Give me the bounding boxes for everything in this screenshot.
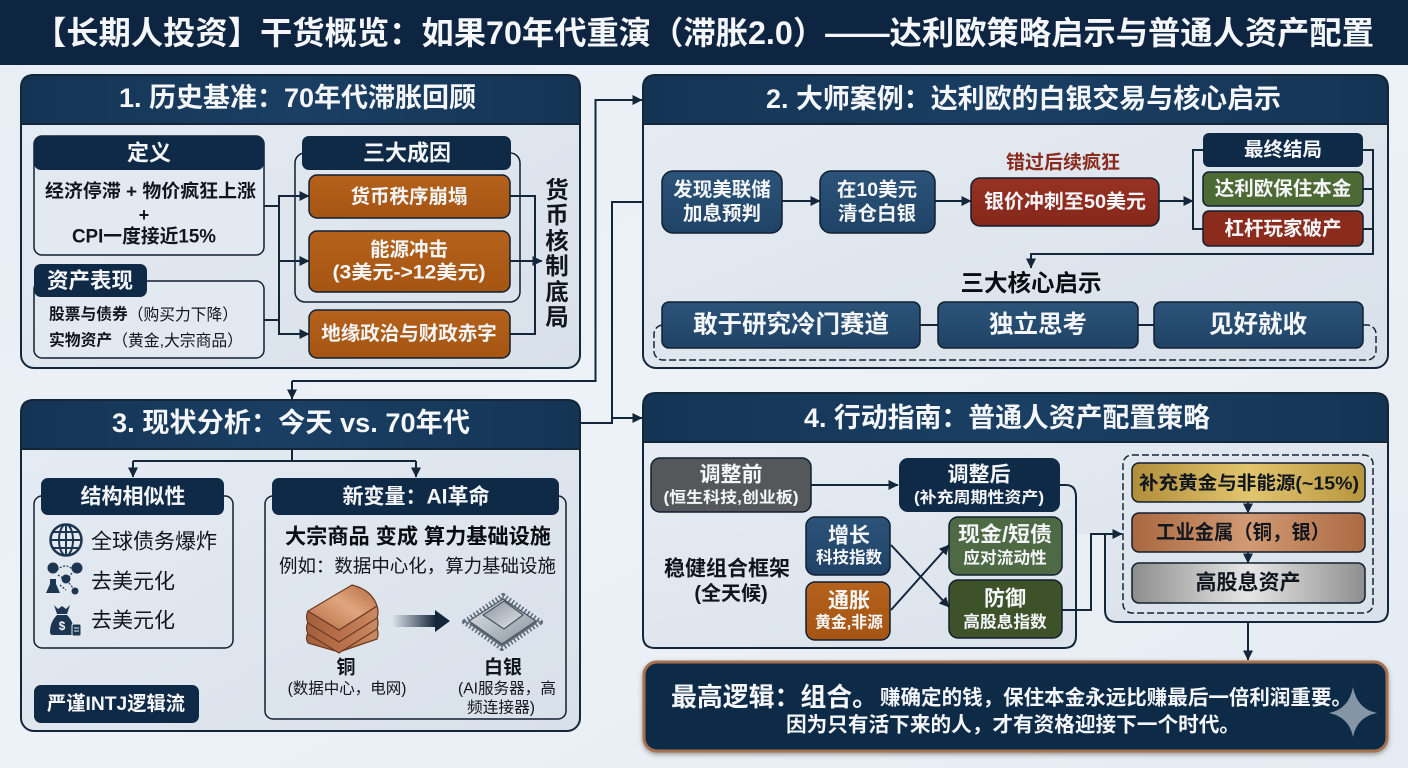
cause: currency order: 货币秩序崩塌 <box>350 185 468 208</box>
lesson: research niches <box>662 302 920 348</box>
heading: three causes <box>302 136 511 170</box>
lesson: take profit: 见好就收 <box>1209 310 1307 338</box>
arrows: into causes <box>264 196 309 334</box>
callout: highest logic: 因为只有活下来的人，才有资格迎接下一个时代。 <box>786 714 1240 736</box>
card: structural similarity: 结构相似性 <box>80 486 186 508</box>
allocation: gold: 补充黄金与非能源(~15%) <box>1139 472 1359 494</box>
panel 4: action guide <box>643 393 1388 648</box>
panel 2 heading <box>643 75 1388 124</box>
step: fed hike call: 加息预判 <box>683 202 761 225</box>
allocation: gold <box>1132 463 1365 502</box>
vertical text: monetary nuclear base: 币 <box>545 202 569 228</box>
card: definition: CPI一度接近15% <box>72 224 216 248</box>
card: structural similarity: 去美元化 <box>91 570 175 594</box>
card: asset performance <box>34 264 264 358</box>
panel 1: historical baseline <box>21 75 580 368</box>
arrow: copper to chip <box>392 610 450 632</box>
callout: highest logic: 赚确定的钱，保住本金永远比赚最后一倍利润重要。 <box>880 686 1352 710</box>
icon: globe <box>50 524 82 556</box>
allocation: industrial metals: 工业金属（铜，银） <box>1156 520 1330 544</box>
step: sold at 10: 清仓白银 <box>838 203 916 225</box>
cause: currency order <box>309 175 510 218</box>
box: defense <box>949 580 1062 638</box>
label: all-weather framework: (全天候) <box>694 581 768 605</box>
box: after adjustment: 调整后 <box>948 464 1010 486</box>
arrow: panel 3 to panel 2 and panel 4 <box>580 202 661 423</box>
box: after adjustment <box>899 458 1060 512</box>
outcome: leveraged bankrupt: 杠杆玩家破产 <box>1224 217 1342 240</box>
label: copper <box>288 656 406 698</box>
arrow: panel 1 to panel 2 and panel 3 <box>292 100 642 399</box>
card: asset performance: 实物资产（黄金,大宗商品） <box>49 330 243 350</box>
step: sold at 10 <box>820 171 935 233</box>
vertical text: monetary nuclear base <box>545 177 569 330</box>
step: fed hike call: 发现美联储 <box>673 178 771 201</box>
label: silver: (AI服务器，高 <box>458 680 556 698</box>
title bar <box>0 0 1408 65</box>
outcome: capital preserved <box>1203 172 1363 206</box>
card: definition: 经济停滞 + 物价疯狂上涨 <box>45 180 257 202</box>
box: defense: 防御 <box>984 588 1026 610</box>
box: growth: 科技指数 <box>816 548 882 567</box>
icon: chip <box>465 596 540 648</box>
icon: copper bars <box>306 585 378 653</box>
outline and flow lines <box>643 442 1388 648</box>
vertical text: monetary nuclear base: 局 <box>545 304 569 330</box>
outcome: capital preserved: 达利欧保住本金 <box>1215 177 1352 200</box>
step: silver to 50 <box>971 178 1159 226</box>
panel 3 heading: 3. 现状分析：今天 vs. 70年代 <box>112 408 470 438</box>
step: fed hike call <box>662 171 782 233</box>
card: structural similarity <box>34 478 233 648</box>
cause: geopolitics: 地缘政治与财政赤字 <box>321 322 497 345</box>
card: new variable AI revolution <box>265 478 566 719</box>
icon: money bag: $ <box>59 619 66 633</box>
box: cash and short bonds: 现金/短债 <box>958 522 1052 546</box>
heading: three causes: 三大成因 <box>363 140 451 166</box>
card: asset performance: 股票与债券（购买力下降） <box>49 304 238 324</box>
callout: highest logic <box>644 662 1387 751</box>
panel 3: current analysis <box>21 400 580 731</box>
card: definition <box>34 136 264 255</box>
vertical text: monetary nuclear base: 底 <box>545 279 569 305</box>
panel 3 heading <box>21 400 580 449</box>
panel 1 heading: 1. 历史基准：70年代滞胀回顾 <box>119 83 476 113</box>
allocation: high dividend: 高股息资产 <box>1196 570 1300 594</box>
step: silver to 50: 银价冲刺至50美元 <box>984 191 1146 213</box>
cause: energy shock <box>309 231 510 292</box>
card: definition: 定义 <box>127 140 171 166</box>
badge: INTJ logic flow: 严谨INTJ逻辑流 <box>47 693 185 715</box>
card: new variable AI revolution: 例如：数据中心化，算力基础设施 <box>279 556 556 576</box>
lesson: take profit <box>1154 302 1363 348</box>
cause: geopolitics <box>309 310 510 358</box>
card: structural similarity: 去美元化 <box>91 610 175 632</box>
arrows: branch to two cards <box>133 449 416 477</box>
box: after adjustment: (补充周期性资产) <box>914 488 1044 506</box>
box: growth <box>806 517 890 575</box>
panel 1 heading <box>21 75 580 124</box>
panel 4 heading: 4. 行动指南：普通人资产配置策略 <box>804 403 1210 433</box>
panel 2: master case <box>643 75 1388 368</box>
label: silver: 频连接器) <box>467 698 535 716</box>
vertical text: monetary nuclear base: 货 <box>545 177 569 203</box>
box: cash and short bonds <box>949 517 1062 575</box>
dashed allocation group <box>1123 455 1373 613</box>
dashed frame and lessons row <box>654 302 1376 360</box>
label: all-weather framework <box>664 558 790 605</box>
label: missed frenzy: 错过后续疯狂 <box>1006 152 1120 174</box>
card: definition: + <box>139 205 149 225</box>
box: growth: 增长 <box>828 524 870 548</box>
label: silver: 白银 <box>484 656 522 678</box>
outcome: header <box>1203 133 1363 167</box>
box: before adjustment <box>651 458 811 512</box>
lesson: think independently <box>938 302 1138 348</box>
cause: energy shock: (3美元->12美元) <box>332 262 486 284</box>
arrows: flow steps <box>782 150 1373 268</box>
card: asset performance: 资产表现 <box>47 269 133 293</box>
panel 2 heading: 2. 大师案例：达利欧的白银交易与核心启示 <box>766 84 1281 114</box>
panel 4 heading <box>643 393 1388 442</box>
allocation: industrial metals <box>1132 513 1365 552</box>
arrow: panel 4 to conclusion <box>1247 622 1249 660</box>
card: new variable AI revolution: 新变量：AI革命 <box>342 484 490 508</box>
box: inflation: 通胀 <box>828 590 870 612</box>
vertical text: monetary nuclear base: 核 <box>545 228 569 254</box>
arrows: out of causes <box>510 196 542 334</box>
icon: network <box>46 562 82 594</box>
outcome: header: 最终结局 <box>1244 139 1322 161</box>
icon: sparkle star <box>1329 687 1377 737</box>
box: inflation <box>806 582 890 640</box>
box: before adjustment: 调整前 <box>700 464 762 486</box>
cause: energy shock: 能源冲击 <box>370 239 448 261</box>
card: new variable AI revolution: 大宗商品 变成 算力基础设施 <box>285 524 551 548</box>
icon: money bag <box>50 605 81 636</box>
title bar: 【长期人投资】干货概览：如果70年代重演（滞胀2.0）——达利欧策略启示与普通人资产配置 <box>34 15 1374 51</box>
outline: three causes group <box>295 153 520 302</box>
box: cash and short bonds: 应对流动性 <box>963 548 1047 568</box>
box: inflation: 黄金,非源 <box>815 612 883 632</box>
arrows: between allocations <box>1247 502 1249 563</box>
badge: INTJ logic flow <box>34 685 199 723</box>
lesson: think independently: 独立思考 <box>989 310 1087 338</box>
label: copper: 铜 <box>336 656 356 678</box>
lesson: research niches: 敢于研究冷门赛道 <box>693 310 889 338</box>
box: defense: 高股息指数 <box>963 612 1047 632</box>
box: before adjustment: (恒生科技,创业板) <box>664 488 798 506</box>
vertical text: monetary nuclear base: 制 <box>545 253 569 279</box>
label: copper: (数据中心，电网) <box>288 680 406 698</box>
allocation: high dividend <box>1132 563 1365 603</box>
label: silver <box>458 656 556 716</box>
heading: three core lessons: 三大核心启示 <box>960 270 1102 296</box>
callout: highest logic: 最高逻辑：组合。 <box>671 682 878 712</box>
outcome: leveraged bankrupt <box>1203 211 1363 246</box>
step: sold at 10: 在10美元 <box>837 179 917 201</box>
card: structural similarity: 全球债务爆炸 <box>91 530 217 554</box>
label: all-weather framework: 稳健组合框架 <box>664 558 790 580</box>
